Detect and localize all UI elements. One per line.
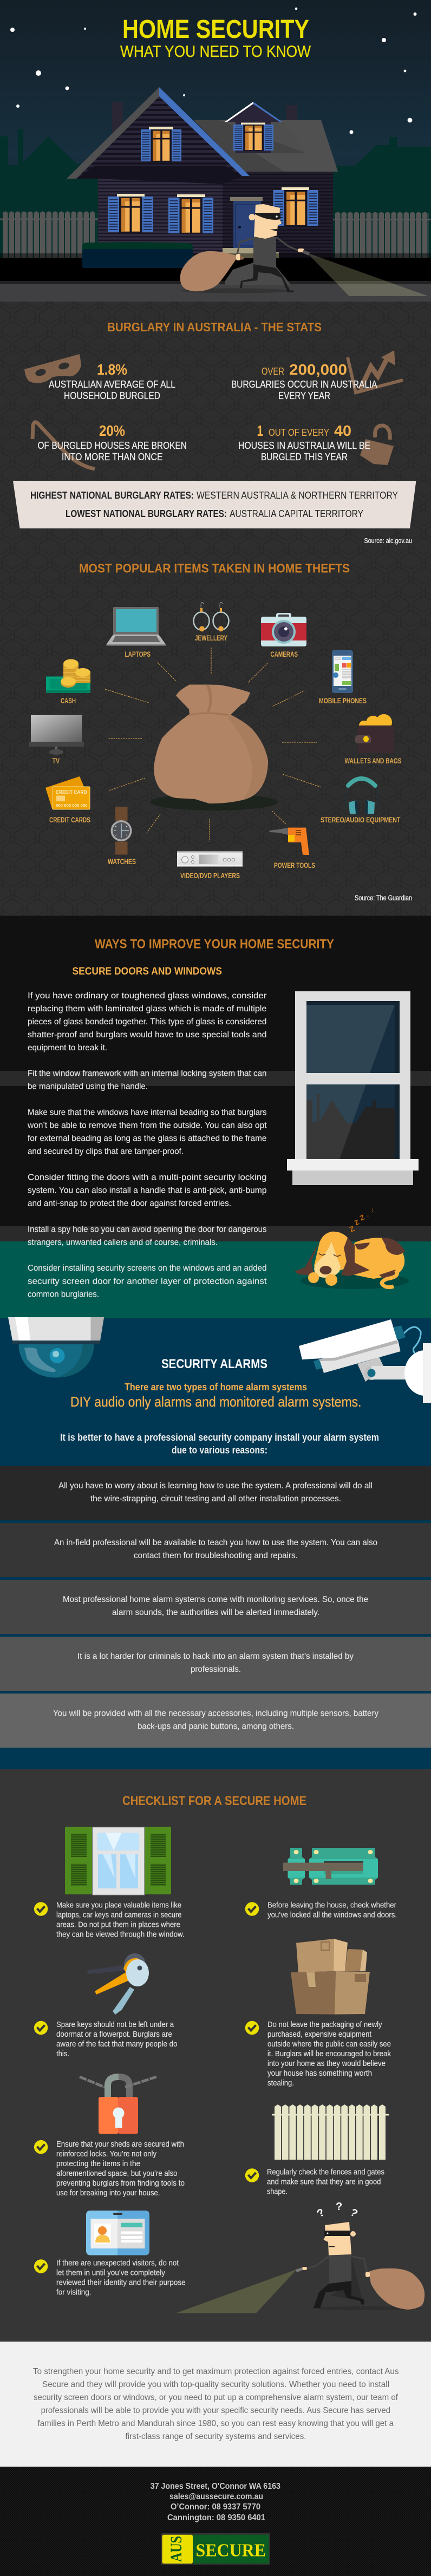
text: professional install — [60, 1432, 379, 1455]
section: ways to improve background — [0, 916, 431, 1318]
text: laminated glass — [28, 991, 267, 1052]
logo: aus secure — [161, 2533, 270, 2565]
text: laminated glass: If you have ordinary or toughened glass windows, consider — [28, 991, 267, 1001]
icon: dome camera — [8, 1317, 104, 1377]
checklist item: valuables — [34, 1901, 185, 1939]
reason row 2: contact them for troubleshooting and repairs. — [134, 1551, 298, 1560]
checklist item: spare keys: aware of the fact that many people do — [56, 2039, 178, 2049]
checklist item: sheds: reinforced locks. You’re not only — [56, 2149, 156, 2159]
icon: cardboard boxes — [291, 1939, 370, 2015]
source note: Source: The Guardian — [355, 893, 412, 902]
item: laptops — [106, 607, 166, 658]
torso — [253, 237, 276, 267]
item: watches — [108, 807, 136, 866]
heading: ways to improve: WAYS TO IMPROVE YOUR HOME SECURITY — [95, 937, 334, 952]
background silhouettes — [0, 129, 431, 260]
checklist item: lock up before leaving: Before leaving the house, check whether — [267, 1901, 396, 1910]
section: checklist — [0, 1769, 431, 2342]
question marks: ? — [348, 2206, 360, 2220]
checklist item: valuables: they can be viewed through the window. — [56, 1930, 185, 1939]
reason row 3: Most professional home alarm systems come with monitoring services. So, once the — [63, 1595, 368, 1604]
reason row 4: It is a lot harder for criminals to hack into an alarm system that’s installed by — [77, 1652, 354, 1661]
windows — [108, 125, 318, 234]
section: closing paragraph: security screen doors or windows, or you need to put up a comprehensive alarm system, our team of — [34, 2393, 399, 2402]
text: internal beading: and secured by clips that are tamper-proof. — [28, 1147, 184, 1156]
text: spy hole: strangers, unwanted callers and of course, criminals. — [28, 1238, 218, 1247]
section: closing paragraph: professionals will be able to provide you with your specific security needs. Aus Secure has served — [41, 2406, 390, 2415]
contact details: 37 Jones Street, O'Connor WA 6163 — [151, 2482, 280, 2491]
torch and hand — [298, 249, 304, 252]
source note: Source: aic.gov.au — [364, 537, 412, 545]
section: closing paragraph: To strengthen your home security and to get maximum protection against forced entries, contact Aus — [33, 2367, 399, 2376]
torch beam — [309, 253, 428, 296]
stat: 1 out of every 40: OUT OF EVERY — [269, 427, 329, 438]
contact details: sales@aussecure.com.au — [169, 2492, 263, 2501]
text: professional install: due to various reasons: — [172, 1444, 267, 1455]
reason row 4 — [0, 1637, 431, 1691]
stars — [10, 8, 417, 134]
sack — [369, 2268, 425, 2310]
door — [223, 197, 279, 261]
section: footer — [0, 2467, 431, 2576]
heading: security alarms: SECURITY ALARMS — [161, 1357, 267, 1371]
stat: over 200,000: EVERY YEAR — [278, 390, 330, 401]
reason row 3 — [0, 1580, 431, 1634]
item: laptops: LAPTOPS — [125, 650, 151, 658]
gable — [76, 96, 242, 179]
reason row 1: All you have to worry about is learning how to use the system. A professional will do all — [58, 1481, 373, 1490]
icon: shuttered window — [65, 1827, 171, 1895]
panel: highest and lowest rates: LOWEST NATIONAL BURGLARY RATES: — [66, 508, 227, 519]
stat: over 200,000: 200,000 — [289, 361, 347, 378]
text: two types of alarm: DIY audio only alarms and monitored alarm systems. — [70, 1394, 362, 1410]
burglar with sack and torch — [180, 204, 428, 296]
section: stats background — [0, 302, 431, 916]
panel: highest and lowest rates: WESTERN AUSTRALIA & NORTHERN TERRITORY — [197, 490, 398, 501]
stat: over 200,000: BURGLARIES OCCUR IN AUSTRALIA — [231, 378, 377, 390]
sleep z marks: . — [367, 1212, 369, 1218]
arms — [306, 2256, 367, 2273]
item: cash: CASH — [61, 696, 76, 705]
legs — [240, 264, 293, 292]
reason row 1 — [0, 1466, 431, 1520]
icon: keys — [87, 1953, 149, 2015]
fence left — [0, 211, 99, 258]
sleep z marks: Z — [358, 1213, 366, 1222]
stat: 1.8%: HOUSEHOLD BURGLED — [64, 390, 160, 401]
icon: id card — [86, 2211, 149, 2255]
house — [67, 87, 338, 261]
stat: 1 out of every 40: 40 — [334, 422, 351, 439]
illustration: sleeping dog — [295, 1207, 409, 1289]
item: stereo and audio equipment — [321, 779, 401, 824]
section: closing paragraph: first-class range of security systems and services. — [126, 2432, 306, 2441]
logo: aus secure: AUS — [167, 2536, 185, 2562]
stat: 1 out of every 40: BURGLED THIS YEAR — [261, 451, 348, 462]
reason row 5 — [0, 1694, 431, 1748]
head — [350, 2231, 356, 2237]
checklist item: sheds: aforementioned space, but you’re also — [56, 2169, 178, 2178]
illustration: night window — [287, 991, 419, 1185]
section: closing paragraph — [0, 2342, 431, 2467]
text: internal beading: won’t be able to remove them from the outside. You can also opt — [27, 1121, 267, 1130]
coat — [330, 2256, 363, 2301]
icon: mask — [24, 354, 81, 383]
item: mobile phones — [319, 650, 367, 705]
stat: 1.8%: 1.8% — [97, 361, 127, 378]
stat: 20% — [38, 422, 187, 462]
panel: highest and lowest rates — [13, 481, 416, 528]
reason row 4: professionals. — [191, 1665, 241, 1674]
icon: door latch — [283, 1848, 378, 1885]
sleep z marks: Z — [353, 1218, 361, 1227]
roof right wing — [194, 120, 338, 172]
reason row 1: the wire-strapping, circuit testing and all other installation processes. — [90, 1494, 341, 1503]
checklist item: visitors: let them in until you’ve completely — [56, 2268, 165, 2278]
checklist item: sheds: protecting the items in the — [56, 2159, 140, 2168]
stat: 1.8%: AUSTRALIAN AVERAGE OF ALL — [49, 378, 175, 390]
item: credit cards — [45, 776, 90, 824]
text: two types of alarm: There are two types of home alarm systems — [125, 1382, 307, 1392]
checklist item: fences: Regularly check the fences and gates — [267, 2168, 384, 2176]
checklist item: sheds — [34, 2140, 185, 2198]
icon: crowbar — [32, 422, 95, 469]
item: wallets and bags: WALLETS AND BAGS — [344, 756, 402, 765]
checklist item: valuables: areas. Do not put them in places where — [56, 1920, 180, 1930]
item: cash — [46, 659, 90, 705]
text: internal beading: Make sure that the windows have internal beading so that burglars — [28, 1108, 266, 1117]
text: laminated glass: shatter-proof and burglars would have to use special tools and — [28, 1030, 266, 1039]
item: video and dvd players: VIDEO/DVD PLAYERS — [180, 871, 240, 880]
checklist item: packaging — [245, 2020, 391, 2088]
reason row 2 — [0, 1523, 431, 1577]
item: power tools: POWER TOOLS — [274, 861, 315, 869]
checklist item: valuables: Make sure you place valuable items like — [56, 1901, 181, 1910]
checklist item: spare keys — [34, 2020, 178, 2058]
heading: checklist: CHECKLIST FOR A SECURE HOME — [122, 1794, 306, 1808]
sleep z marks: Z — [348, 1224, 356, 1234]
contact details: O’Connor: 08 9337 5770 — [171, 2502, 260, 2512]
item: tv: TV — [52, 756, 60, 765]
checklist item: lock up before leaving — [245, 1901, 397, 1920]
text: security screens — [28, 1264, 267, 1299]
sleep z marks — [348, 1207, 374, 1234]
text: laminated glass: pieces of glass bonded together. This type of glass is considered — [28, 1017, 266, 1027]
text: internal beading — [27, 1108, 267, 1156]
checklist item: packaging: outside where the public can easily see — [267, 2039, 391, 2049]
section: hero night scene — [0, 0, 431, 302]
text: laminated glass: replacing them with laminated glass which is made of multiple — [28, 1004, 267, 1014]
stat: 20%: OF BURGLED HOUSES ARE BROKEN — [38, 440, 187, 451]
contact details: Cannington: 08 9350 6401 — [167, 2513, 265, 2522]
title: HOME SECURITY — [122, 15, 309, 44]
checklist item: packaging: it. Burglars will be encouraged to break — [267, 2049, 391, 2058]
item: credit cards: CREDIT CARD — [56, 789, 87, 796]
icon: rising chart — [348, 350, 403, 393]
item: credit cards: CREDIT CARDS — [49, 815, 90, 824]
dormer — [225, 102, 282, 153]
reason row 5: back-ups and panic buttons, among others. — [138, 1722, 294, 1731]
text: multi-point locks — [28, 1173, 267, 1208]
checklist item: visitors — [34, 2259, 186, 2297]
torch beam — [176, 2270, 297, 2313]
icon: picket fence — [272, 2104, 389, 2160]
checklist item: lock up before leaving: you’ve locked all the windows and doors. — [267, 1910, 397, 1920]
ground — [0, 253, 431, 302]
panel: highest and lowest rates: HIGHEST NATIONAL BURGLARY RATES: — [30, 490, 194, 501]
text: two types of alarm — [70, 1382, 362, 1410]
walls — [98, 172, 223, 258]
checklist item: packaging: purchased, expensive equipment — [267, 2030, 372, 2039]
item: watches: WATCHES — [108, 857, 136, 866]
text: spy hole — [28, 1225, 266, 1247]
item: video and dvd players — [177, 851, 243, 880]
item: stereo and audio equipment: STEREO/AUDIO EQUIPMENT — [321, 815, 401, 824]
torso — [329, 2255, 351, 2284]
checklist item: packaging: Do not leave the packaging of newly — [267, 2020, 382, 2029]
illustration: confused burglar — [176, 2201, 425, 2313]
item: wallets and bags — [344, 714, 402, 765]
text: window framework — [28, 1069, 266, 1091]
text: laminated glass: equipment to break it. — [28, 1043, 107, 1052]
subheading: doors and windows: SECURE DOORS AND WINDOWS — [73, 966, 222, 977]
text: window framework: Fit the window framework with an internal locking system that can — [28, 1069, 266, 1078]
checklist item: visitors: reviewed their identity and their purpose — [56, 2278, 186, 2287]
item: tv — [29, 712, 84, 765]
checklist item: spare keys: Spare keys should not be left under a — [56, 2020, 174, 2029]
bush — [82, 242, 193, 268]
checklist item: visitors: If there are unexpected visitors, do not — [56, 2259, 179, 2268]
item: cameras: CAMERAS — [271, 650, 298, 658]
icon: open padlock — [360, 426, 394, 465]
heading: popular items: MOST POPULAR ITEMS TAKEN IN HOME THEFTS — [79, 561, 350, 575]
checklist item: sheds: preventing burglars from finding tools to — [56, 2179, 185, 2188]
checklist item: valuables: laptops, car keys and cameras in secure — [56, 1910, 182, 1920]
coat — [225, 263, 291, 285]
stat: 1 out of every 40: HOUSES IN AUSTRALIA WILL BE — [238, 440, 370, 451]
text: multi-point locks: Consider fitting the doors with a multi-point security locking — [28, 1173, 267, 1182]
reason row 5: You will be provided with all the necessary accessories, including multiple sensors, battery — [53, 1709, 378, 1718]
item: cameras — [261, 613, 306, 658]
item: power tools — [270, 828, 315, 869]
checklist item: spare keys: doormat or a flowerpot. Burglars are — [56, 2030, 172, 2039]
checklist item: fences — [245, 2168, 384, 2196]
reason row 3: alarm sounds, the authorities will be alerted immediately. — [112, 1608, 319, 1617]
stat: 20%: 20% — [99, 422, 125, 439]
text: window framework: be manipulated using the handle. — [28, 1082, 148, 1091]
item: mobile phones: MOBILE PHONES — [319, 696, 367, 705]
text: security screens: Consider installing security screens on the windows and an added — [28, 1264, 266, 1273]
reason row 2: An in-field professional will be available to teach you how to use the system. You can also — [54, 1538, 377, 1547]
stat: 1 out of every 40: 1 — [257, 422, 263, 439]
dashed connectors — [105, 648, 321, 842]
checklist item: fences: shape. — [267, 2187, 288, 2196]
stat: over 200,000: OVER — [262, 366, 284, 377]
heading: burglary stats: BURGLARY IN AUSTRALIA - THE STATS — [107, 320, 322, 334]
section: closing paragraph: Secure and they will provide you with top-quality security solutions. Whether you need to install — [42, 2380, 389, 2389]
section: security alarms — [0, 1317, 431, 1769]
subtitle: WHAT YOU NEED TO KNOW — [120, 43, 311, 61]
arms — [237, 237, 299, 254]
checklist item: fences: and make sure that they are in good — [267, 2178, 381, 2186]
checklist item: packaging: your house has something worth — [267, 2069, 372, 2078]
text: security screens: security screen door for another layer of protection against — [28, 1277, 267, 1286]
legs — [314, 2281, 364, 2308]
item: jewellery: JEWELLERY — [195, 633, 227, 642]
stat: over 200,000 — [231, 361, 377, 401]
icon: padlock and chain — [80, 2077, 156, 2134]
text: multi-point locks: and anti-snap to protect the door against forced entries. — [28, 1199, 231, 1208]
checklist item: visitors: for visiting. — [56, 2288, 91, 2297]
question marks: ? — [315, 2206, 326, 2220]
text: spy hole: Install a spy hole so you can avoid opening the door for dangerous — [28, 1225, 266, 1234]
question marks — [315, 2201, 360, 2220]
text: professional install: It is better to have a professional security company install your alarm system — [60, 1432, 379, 1443]
text: internal beading: for external beading as long as the glass is attached to the frame — [28, 1134, 267, 1143]
icon: wall camera — [299, 1319, 431, 1403]
stat: 1 out of every 40 — [238, 422, 370, 462]
question marks: ? — [336, 2201, 342, 2213]
checklist item: packaging: into your home as they would believe — [267, 2059, 386, 2068]
checklist item: spare keys: this. — [56, 2049, 69, 2058]
stat: 20%: INTO MORE THAN ONCE — [62, 451, 162, 462]
panel: highest and lowest rates: AUSTRALIA CAPITAL TERRITORY — [230, 508, 363, 519]
checklist item: sheds: Ensure that your sheds are secured with — [56, 2140, 184, 2149]
item: jewellery — [194, 602, 228, 642]
checklist item: packaging: stealing. — [267, 2078, 294, 2088]
text: multi-point locks: system. You can also install a handle that is anti-pick, anti-bump — [28, 1186, 267, 1195]
sack of loot — [150, 684, 278, 810]
sleep z marks: : — [371, 1207, 374, 1213]
chimneys — [112, 102, 297, 134]
contact details — [151, 2482, 280, 2522]
sack — [180, 251, 238, 291]
text: security screens: common burglaries. — [28, 1290, 99, 1299]
fence right — [331, 212, 431, 258]
checklist item: sheds: use for breaking into your house. — [56, 2188, 160, 2198]
head — [249, 214, 256, 220]
logo: aus secure: SECURE — [196, 2541, 266, 2561]
section: closing paragraph: families in Perth Metro and Mandurah since 1980, so you can rest easy knowing that you will get a — [38, 2419, 394, 2428]
item: credit cards: 000 000 000 000 — [56, 804, 88, 808]
stat: 1.8% — [49, 361, 175, 401]
